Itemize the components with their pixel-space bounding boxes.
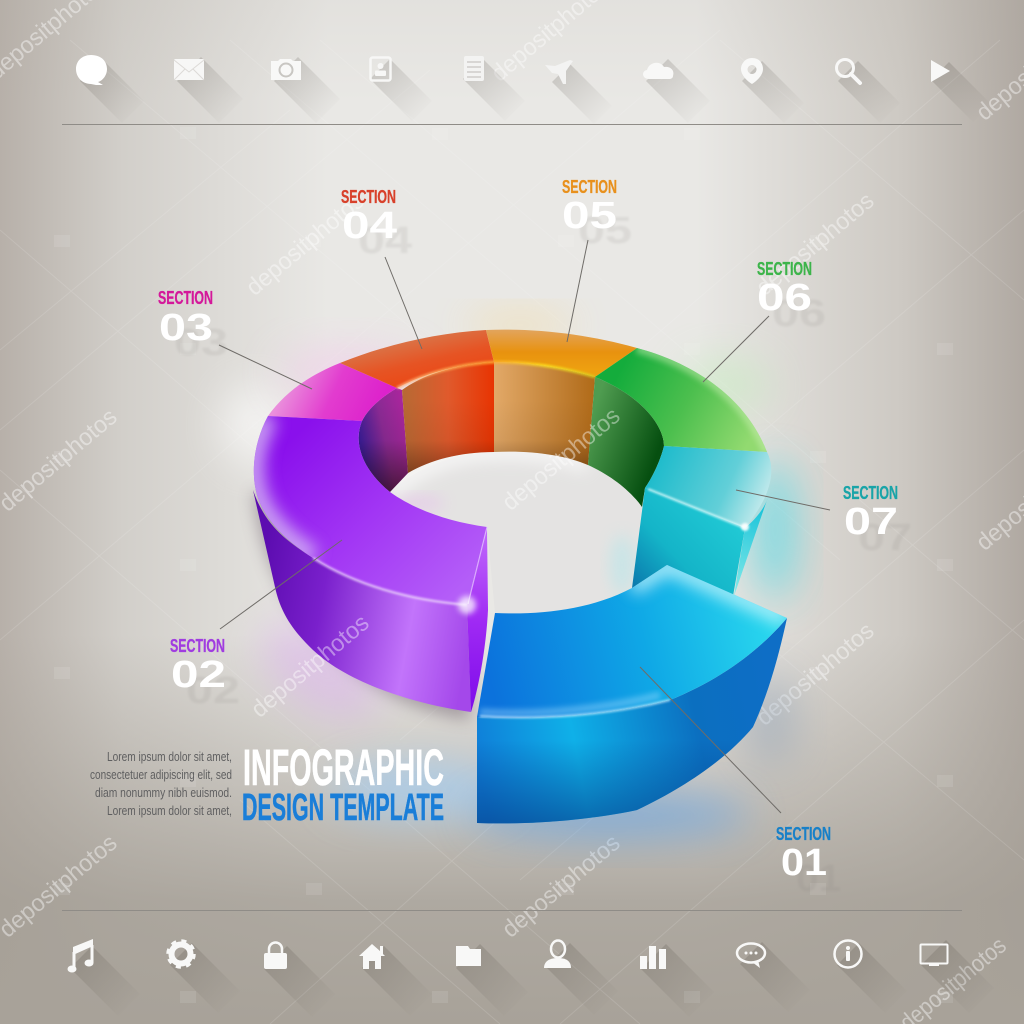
top: section 02 — [253, 416, 487, 605]
icon: user — [544, 940, 618, 1015]
cut face: section 07 — [632, 488, 745, 596]
body text — [90, 749, 232, 818]
label: section 07 — [843, 483, 912, 559]
top: section 04 — [340, 330, 494, 388]
icon: info — [834, 940, 907, 1013]
edge highlight — [480, 695, 670, 717]
label: section 05 — [562, 177, 632, 252]
top: section 01 — [477, 565, 787, 718]
body text: consectetuer adipiscing elit, sed — [90, 767, 232, 782]
icon: cloud — [643, 59, 710, 123]
label: section 02: 02 — [171, 654, 226, 696]
glows and cast shadow around donut — [220, 313, 797, 839]
label: section 05: SECTION — [562, 177, 617, 197]
title — [242, 739, 444, 829]
edge highlight — [648, 489, 749, 531]
top: section 05 — [486, 330, 637, 377]
label: section 01: 01 — [796, 858, 841, 900]
title: DESIGN TEMPLATE — [242, 787, 444, 829]
stock watermarks: depositphotos — [241, 187, 369, 301]
label: section 03 — [158, 288, 228, 364]
divider bottom — [62, 910, 962, 911]
highlight on back inner rim — [397, 362, 595, 388]
label: section 05: 05 — [562, 195, 617, 237]
divider top — [62, 124, 962, 125]
body text: Lorem ipsum dolor sit amet, — [107, 803, 232, 818]
label: section 03: 03 — [174, 322, 228, 364]
stock watermarks: depositphotos — [497, 829, 625, 943]
icon: music note — [68, 939, 140, 1016]
label: section 01 — [776, 824, 841, 900]
title: INFOGRAPHIC — [243, 739, 444, 796]
label: section 06: SECTION — [757, 259, 812, 279]
body text: Lorem ipsum dolor sit amet, — [107, 749, 232, 764]
label: section 03: SECTION — [158, 288, 213, 308]
label: section 06: 06 — [757, 277, 812, 319]
inner wall: section 03 — [359, 388, 408, 492]
label: section 04 — [341, 187, 412, 262]
inner wall: section 06 — [588, 377, 664, 507]
stock watermarks over chart — [246, 402, 625, 723]
top icon row — [76, 55, 991, 124]
leader lines — [219, 240, 830, 813]
icon: play — [931, 60, 991, 122]
icon: airplane — [545, 60, 612, 124]
label: section 02 — [170, 636, 240, 712]
body text: diam nonummy nibh euismod. — [95, 785, 232, 800]
bottom icon row — [68, 939, 994, 1017]
edge highlight — [313, 527, 487, 614]
icon: monitor — [920, 940, 994, 1013]
icon: map pin — [741, 58, 804, 123]
stock watermarks over chart: depositphotos — [497, 402, 625, 516]
label: section 01: 01 — [781, 842, 827, 884]
label: section 04: 04 — [342, 205, 397, 247]
icon: contact card — [370, 58, 432, 121]
label: section 04: SECTION — [341, 187, 396, 207]
outer side: section 01 — [477, 618, 787, 823]
label: section 04: 04 — [358, 220, 412, 262]
icon: bar chart — [640, 944, 714, 1017]
icon: house — [359, 944, 432, 1016]
top: section 07 — [645, 446, 771, 528]
inner wall: section 04 — [402, 362, 494, 473]
icon: chat bubble — [737, 942, 810, 1012]
label: section 06: 06 — [772, 293, 826, 335]
icon: envelope — [174, 57, 243, 123]
stock watermarks: depositphotos — [751, 187, 879, 301]
outer side: section 07 — [734, 497, 768, 596]
label: section 07: 07 — [858, 517, 912, 559]
section 07 block — [632, 446, 771, 596]
label: section 01: SECTION — [776, 824, 831, 844]
label: section 03: 03 — [159, 307, 213, 349]
cut face: section 02 — [467, 527, 488, 712]
label: section 05: 05 — [578, 210, 632, 252]
icon: magnifier — [836, 60, 900, 123]
center hole floor — [390, 452, 642, 613]
inner wall: section 05 — [494, 362, 595, 465]
label: section 06 — [757, 259, 826, 335]
icon: padlock — [264, 942, 335, 1017]
label: section 07: 07 — [844, 501, 898, 543]
outer side: section 02 — [253, 490, 471, 712]
icon: camera — [271, 57, 340, 123]
icon: speech bubble — [76, 55, 144, 123]
stock watermarks over chart: depositphotos — [246, 609, 374, 723]
top: section 03 — [268, 363, 397, 421]
icon: gear — [168, 941, 240, 1013]
stock watermarks: depositphotos — [751, 617, 879, 731]
section 02 block — [253, 416, 488, 712]
donut chart — [253, 330, 787, 823]
icon: document — [463, 56, 525, 121]
icon: folder — [456, 944, 528, 1016]
label: section 02: SECTION — [170, 636, 225, 656]
section 01 block — [477, 565, 787, 823]
top: section 06 — [595, 348, 767, 452]
label: section 07: SECTION — [843, 483, 898, 503]
label: section 02: 02 — [186, 670, 240, 712]
